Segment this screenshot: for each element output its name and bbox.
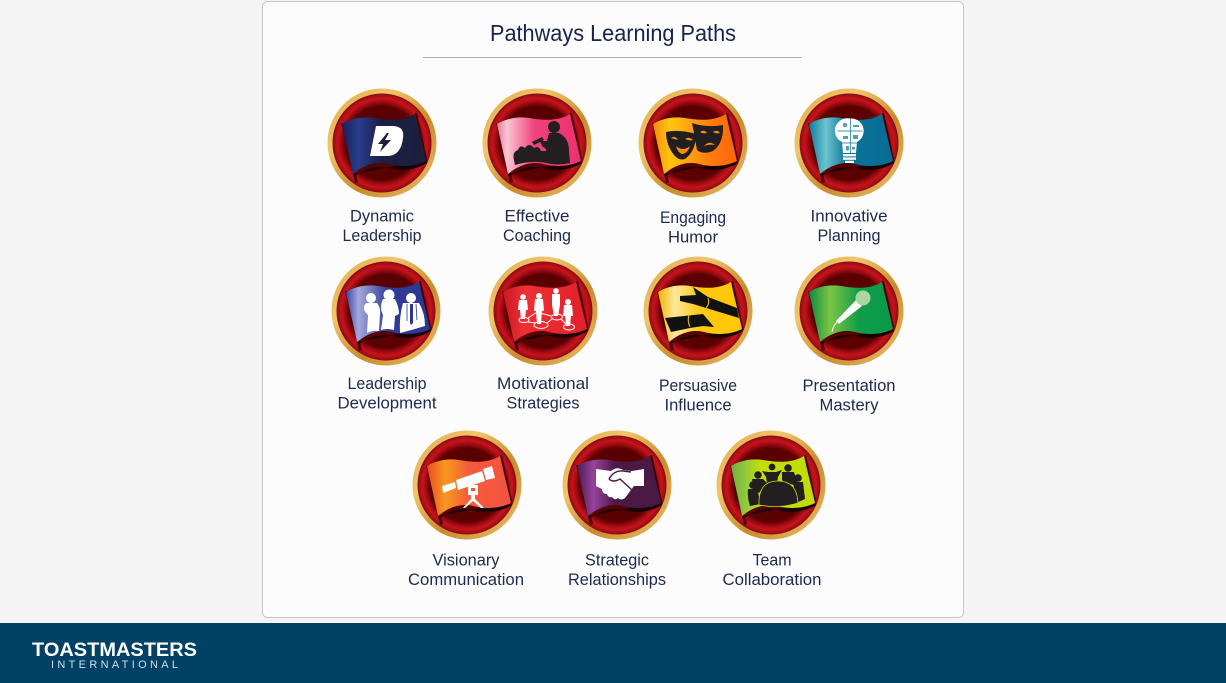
badge: Dynamic Leadership — [328, 88, 436, 245]
badge: Engaging Humor — [638, 88, 748, 246]
footer bar — [0, 623, 1226, 683]
badge: Presentation Mastery — [794, 256, 904, 414]
badge: Motivational Strategies: Strategies — [506, 394, 580, 412]
label: Dynamic — [350, 206, 414, 226]
badge: Team Collaboration: Collaboration — [722, 570, 822, 589]
badge: Effective Coaching — [482, 88, 592, 245]
badge: Visionary Communication — [408, 430, 524, 589]
label: Engaging — [660, 208, 726, 227]
label: Innovative — [810, 206, 888, 226]
badge: Visionary Communication: Communication — [408, 570, 524, 589]
label: Strategic — [585, 550, 649, 570]
medal with flag and telescope — [412, 430, 522, 540]
label: Effective — [504, 206, 570, 226]
badge: Engaging Humor: Humor — [668, 228, 718, 246]
badge: Dynamic Leadership: Leadership — [342, 226, 422, 245]
medal with flag and theatre masks — [638, 88, 748, 198]
label: Visionary — [432, 550, 500, 570]
medal with flag and lightning D icon — [328, 88, 436, 198]
Toastmasters International logo: INTERNATIONAL — [51, 659, 178, 671]
panel: learning paths card — [262, 2, 964, 618]
label: Team — [752, 550, 792, 570]
badge: Strategic Relationships: Relationships — [568, 570, 666, 589]
Toastmasters International logo — [32, 640, 197, 671]
medal with flag and three business people — [332, 256, 440, 366]
medal with flag and microphone — [794, 256, 904, 366]
badge: Motivational Strategies — [488, 256, 598, 412]
label: Leadership — [348, 374, 426, 393]
title: Pathways Learning Paths — [490, 20, 736, 46]
medal with flag and speaker silhouette — [482, 88, 592, 198]
label: Persuasive — [659, 376, 737, 395]
label: Presentation — [802, 376, 896, 395]
label: Motivational — [497, 374, 589, 393]
badge: Presentation Mastery: Mastery — [820, 396, 879, 414]
badge: Persuasive Influence: Influence — [664, 396, 732, 414]
medal with flag and light bulb — [794, 88, 904, 198]
medal with flag and people around a table — [716, 430, 826, 540]
badge: Team Collaboration — [716, 430, 826, 589]
badge: Leadership Development: Development — [338, 394, 437, 412]
Toastmasters International logo: TOASTMASTERS — [32, 640, 197, 661]
medal with flag and handshake — [562, 430, 672, 540]
badge: Strategic Relationships — [562, 430, 672, 589]
badge: Effective Coaching: Coaching — [503, 226, 571, 245]
badge: Leadership Development — [332, 256, 440, 412]
medal with flag and pointing hands — [644, 256, 752, 366]
badge: Persuasive Influence — [644, 256, 752, 414]
badge: Innovative Planning — [794, 88, 904, 245]
badge: Innovative Planning: Planning — [818, 226, 880, 245]
medal with flag and connected people — [488, 256, 598, 366]
